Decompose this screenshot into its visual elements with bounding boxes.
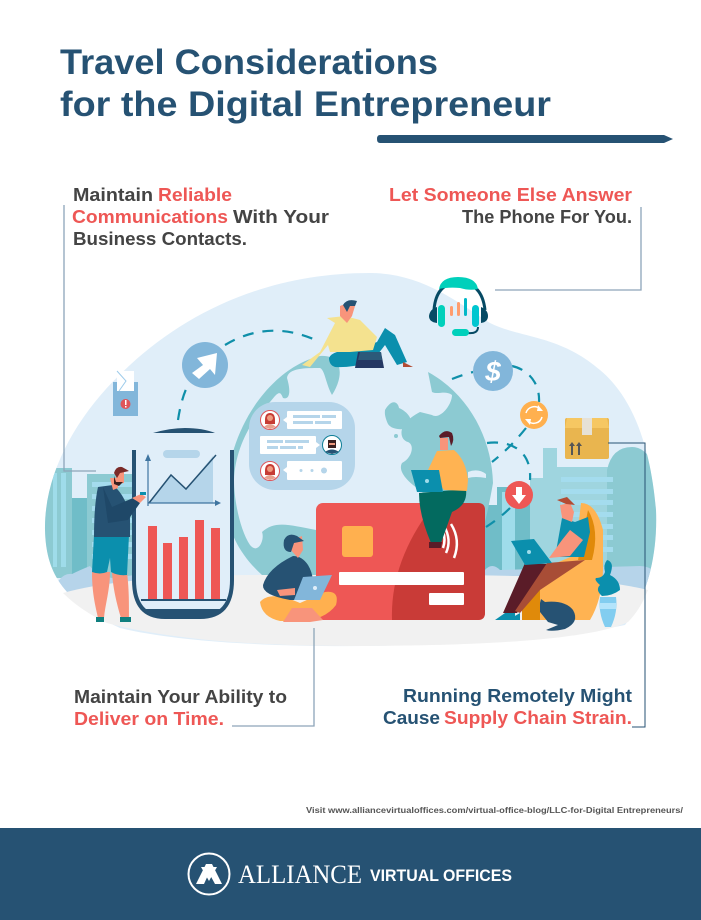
plant in vase	[596, 560, 620, 627]
person with phone	[92, 467, 146, 622]
text block: reliable communications: Maintain	[73, 185, 153, 205]
chat panel	[249, 402, 355, 490]
source link: Visit www.alliancevirtualoffices.com/virtual-office-blog/LLC-for-Digital Entrepreneurs/	[306, 806, 684, 815]
person sitting cross-legged	[260, 535, 337, 622]
chat avatars	[260, 410, 342, 480]
cat	[540, 599, 575, 631]
dashed connector paths	[178, 331, 539, 527]
line chart	[145, 450, 221, 506]
bar chart	[148, 520, 220, 600]
skyline right	[485, 447, 660, 595]
person on card	[411, 431, 468, 548]
connector: answer the phone	[495, 207, 641, 290]
background blob	[45, 273, 656, 646]
text block: reliable communications: Reliable	[158, 185, 232, 205]
connector: deliver on time	[232, 628, 314, 726]
globe with continents	[226, 356, 493, 575]
footer logo: VIRTUAL OFFICES	[370, 866, 512, 885]
footer band	[0, 828, 701, 920]
text block: reliable communications	[72, 185, 329, 249]
person on top of globe	[302, 300, 413, 368]
icon: headset	[429, 277, 488, 336]
text block: answer the phone	[389, 185, 632, 227]
text block: deliver on time: Maintain Your Ability to	[74, 687, 287, 707]
text block: supply chain: Running Remotely Might	[403, 686, 632, 706]
chat bubbles	[260, 411, 342, 480]
icon: cardboard box	[565, 418, 609, 459]
icon: dollar circle	[473, 351, 513, 391]
title: Travel Considerations	[60, 43, 438, 82]
title	[60, 43, 551, 124]
footer logo	[188, 854, 512, 894]
text block: answer the phone: The Phone For You.	[462, 207, 632, 227]
credit card	[316, 503, 485, 620]
skyline left	[45, 468, 132, 592]
title underline arrow bar	[377, 135, 673, 143]
footer logo: ALLIANCE	[238, 860, 362, 889]
text block: deliver on time	[74, 687, 287, 729]
card chip	[342, 526, 373, 557]
text block: supply chain: Supply Chain Strain.	[444, 708, 632, 728]
icon: up-right arrow circle	[182, 342, 228, 388]
text block: supply chain	[383, 686, 632, 728]
illustration	[44, 273, 660, 646]
title: for the Digital Entrepreneur	[60, 85, 551, 124]
connector: supply chain	[608, 443, 645, 727]
connector: reliable communications	[64, 205, 96, 471]
person in armchair	[495, 497, 603, 620]
phone chart	[134, 428, 232, 617]
contactless waves	[443, 524, 457, 558]
text block: reliable communications: With Your	[233, 207, 329, 227]
text block: reliable communications: Communications	[72, 207, 228, 227]
icon: refresh circle	[520, 401, 548, 429]
icon: down arrow circle	[505, 481, 533, 509]
icon: dollar circle: $	[484, 356, 501, 387]
text block: answer the phone: Let Someone Else Answer	[389, 185, 632, 205]
text block: deliver on time: Deliver on Time.	[74, 709, 224, 729]
text block: supply chain: Cause	[383, 708, 440, 728]
icon: envelope alert	[113, 371, 138, 416]
text block: reliable communications: Business Contacts.	[73, 229, 247, 249]
card stripes	[339, 572, 464, 605]
floor	[63, 575, 648, 646]
